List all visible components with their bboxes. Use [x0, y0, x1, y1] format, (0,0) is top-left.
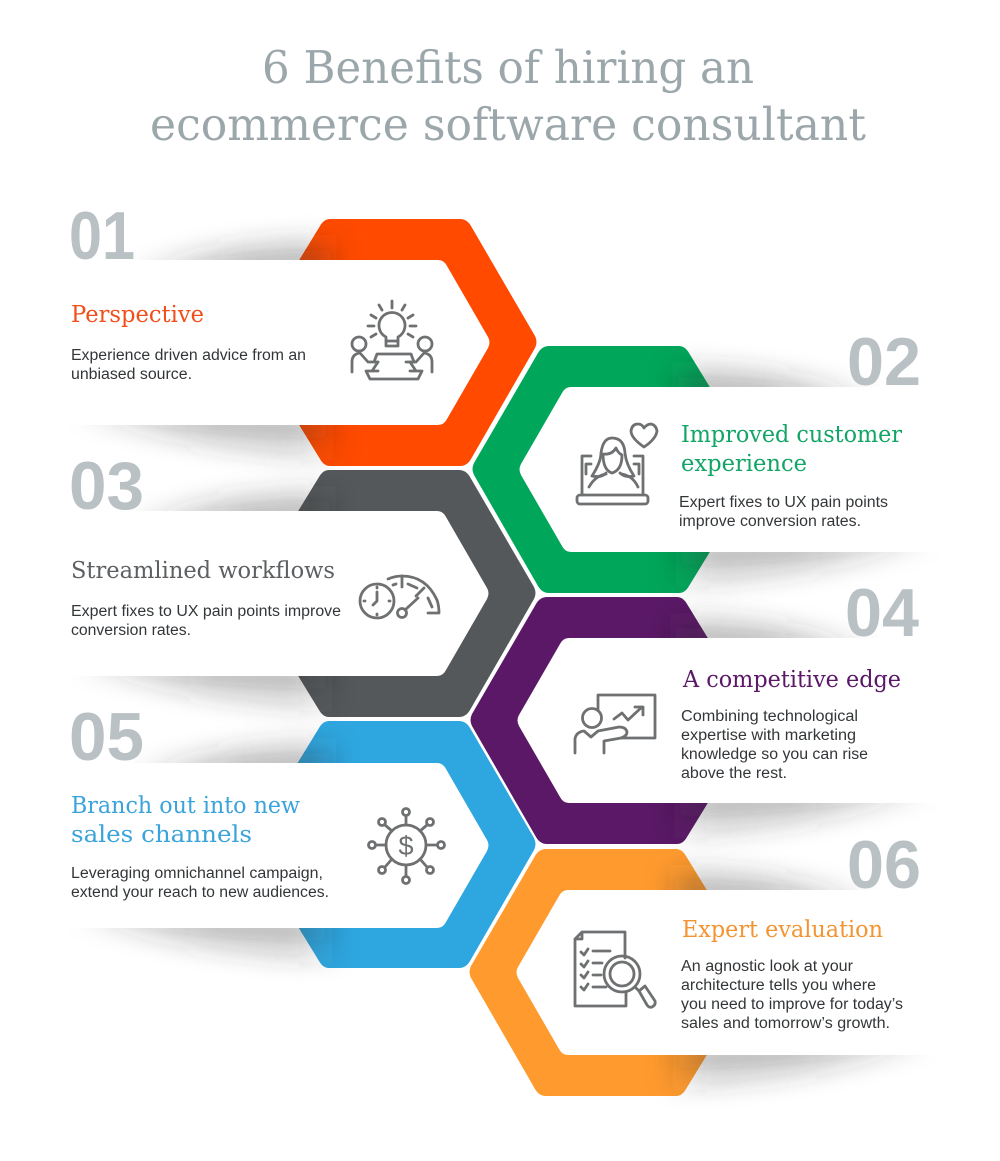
text: expert evaluation: Expert evaluation	[682, 917, 883, 943]
drop shadows	[70, 234, 350, 462]
text: a competitive edge: Combining technological	[681, 708, 858, 725]
text: improved customer experience: Expert fixes to UX pain points	[679, 494, 888, 511]
text: improved customer experience: experience	[681, 451, 807, 477]
title: 6 Benefits of hiring an	[262, 41, 754, 94]
icon: presenter with growth chart	[575, 695, 655, 753]
text: perspective: unbiased source.	[71, 366, 192, 383]
drop shadows	[69, 737, 349, 965]
white arrow panel	[0, 260, 490, 425]
icon: customer on laptop with heart	[577, 424, 657, 504]
white arrow panel	[0, 763, 488, 928]
text: a competitive edge: expertise with marketing	[681, 727, 856, 744]
white arrow panel	[0, 511, 488, 676]
text: improved customer experience	[679, 422, 902, 530]
icon: clock and speed gauge	[360, 576, 439, 618]
white arrow panel	[518, 638, 1000, 803]
number 02: 02	[847, 324, 921, 400]
panel: 02 improved customer experience	[472, 324, 1000, 593]
number 04: 04	[845, 575, 919, 651]
text: perspective: Perspective	[71, 302, 204, 328]
text: streamlined workflows: conversion rates.	[71, 622, 191, 639]
title: ecommerce software consultant	[150, 98, 866, 151]
drop shadows	[659, 361, 939, 589]
text: a competitive edge	[681, 667, 901, 782]
text: branch out into new sales channels: Leveraging omnichannel campaign,	[71, 865, 323, 882]
text: expert evaluation	[681, 917, 903, 1032]
text: a competitive edge: above the rest.	[681, 765, 787, 782]
icon: lightbulb meeting	[352, 301, 432, 379]
icon: checklist with magnifier	[575, 932, 655, 1007]
hexagon frame: orange	[290, 219, 536, 466]
icon: dollar network: $	[398, 831, 414, 861]
number 01: 01	[69, 198, 135, 274]
text: improved customer experience: Improved customer	[681, 422, 902, 448]
hexagon frame: purple	[470, 597, 717, 844]
hexagon frame: blue	[289, 721, 536, 968]
text: branch out into new sales channels	[71, 793, 329, 901]
text: perspective	[71, 302, 306, 383]
hexagon frame: gray	[289, 470, 536, 717]
icon: dollar network	[368, 808, 444, 884]
text: streamlined workflows	[71, 558, 341, 639]
text: branch out into new sales channels: sales channels	[71, 822, 252, 848]
text: improved customer experience: improve conversion rates.	[679, 513, 861, 530]
drop shadows	[656, 864, 936, 1092]
white arrow panel	[516, 890, 1000, 1055]
hexagon frame: green	[472, 346, 719, 593]
text: branch out into new sales channels: extend your reach to new audiences.	[71, 884, 329, 901]
text: branch out into new sales channels: Branch out into new	[71, 793, 300, 819]
number 03: 03	[69, 448, 144, 524]
panel: 04 a competitive edge	[470, 575, 1000, 844]
title	[150, 41, 866, 151]
hexagon frame: amber	[470, 849, 716, 1096]
drop shadows	[657, 612, 937, 840]
panel: 01 perspective	[0, 198, 536, 466]
text: expert evaluation: architecture tells you where	[681, 977, 876, 994]
text: streamlined workflows: Streamlined workflows	[71, 558, 335, 584]
text: expert evaluation: sales and tomorrow’s growth.	[681, 1015, 890, 1032]
text: perspective: Experience driven advice from an	[71, 347, 306, 364]
white arrow panel	[520, 387, 1000, 552]
panel: 03 streamlined workflows	[0, 448, 536, 717]
text: expert evaluation: you need to improve for today’s	[681, 996, 903, 1013]
number 05: 05	[69, 699, 144, 775]
panel: 06 expert evaluation	[470, 827, 1000, 1096]
number 06: 06	[847, 827, 921, 903]
text: a competitive edge: A competitive edge	[682, 667, 901, 693]
text: streamlined workflows: Expert fixes to UX pain points improve	[71, 603, 341, 620]
text: a competitive edge: knowledge so you can rise	[681, 746, 868, 763]
drop shadows	[69, 485, 349, 713]
text: expert evaluation: An agnostic look at your	[681, 958, 853, 975]
panel: 05 branch out into new sales channels	[0, 699, 536, 968]
